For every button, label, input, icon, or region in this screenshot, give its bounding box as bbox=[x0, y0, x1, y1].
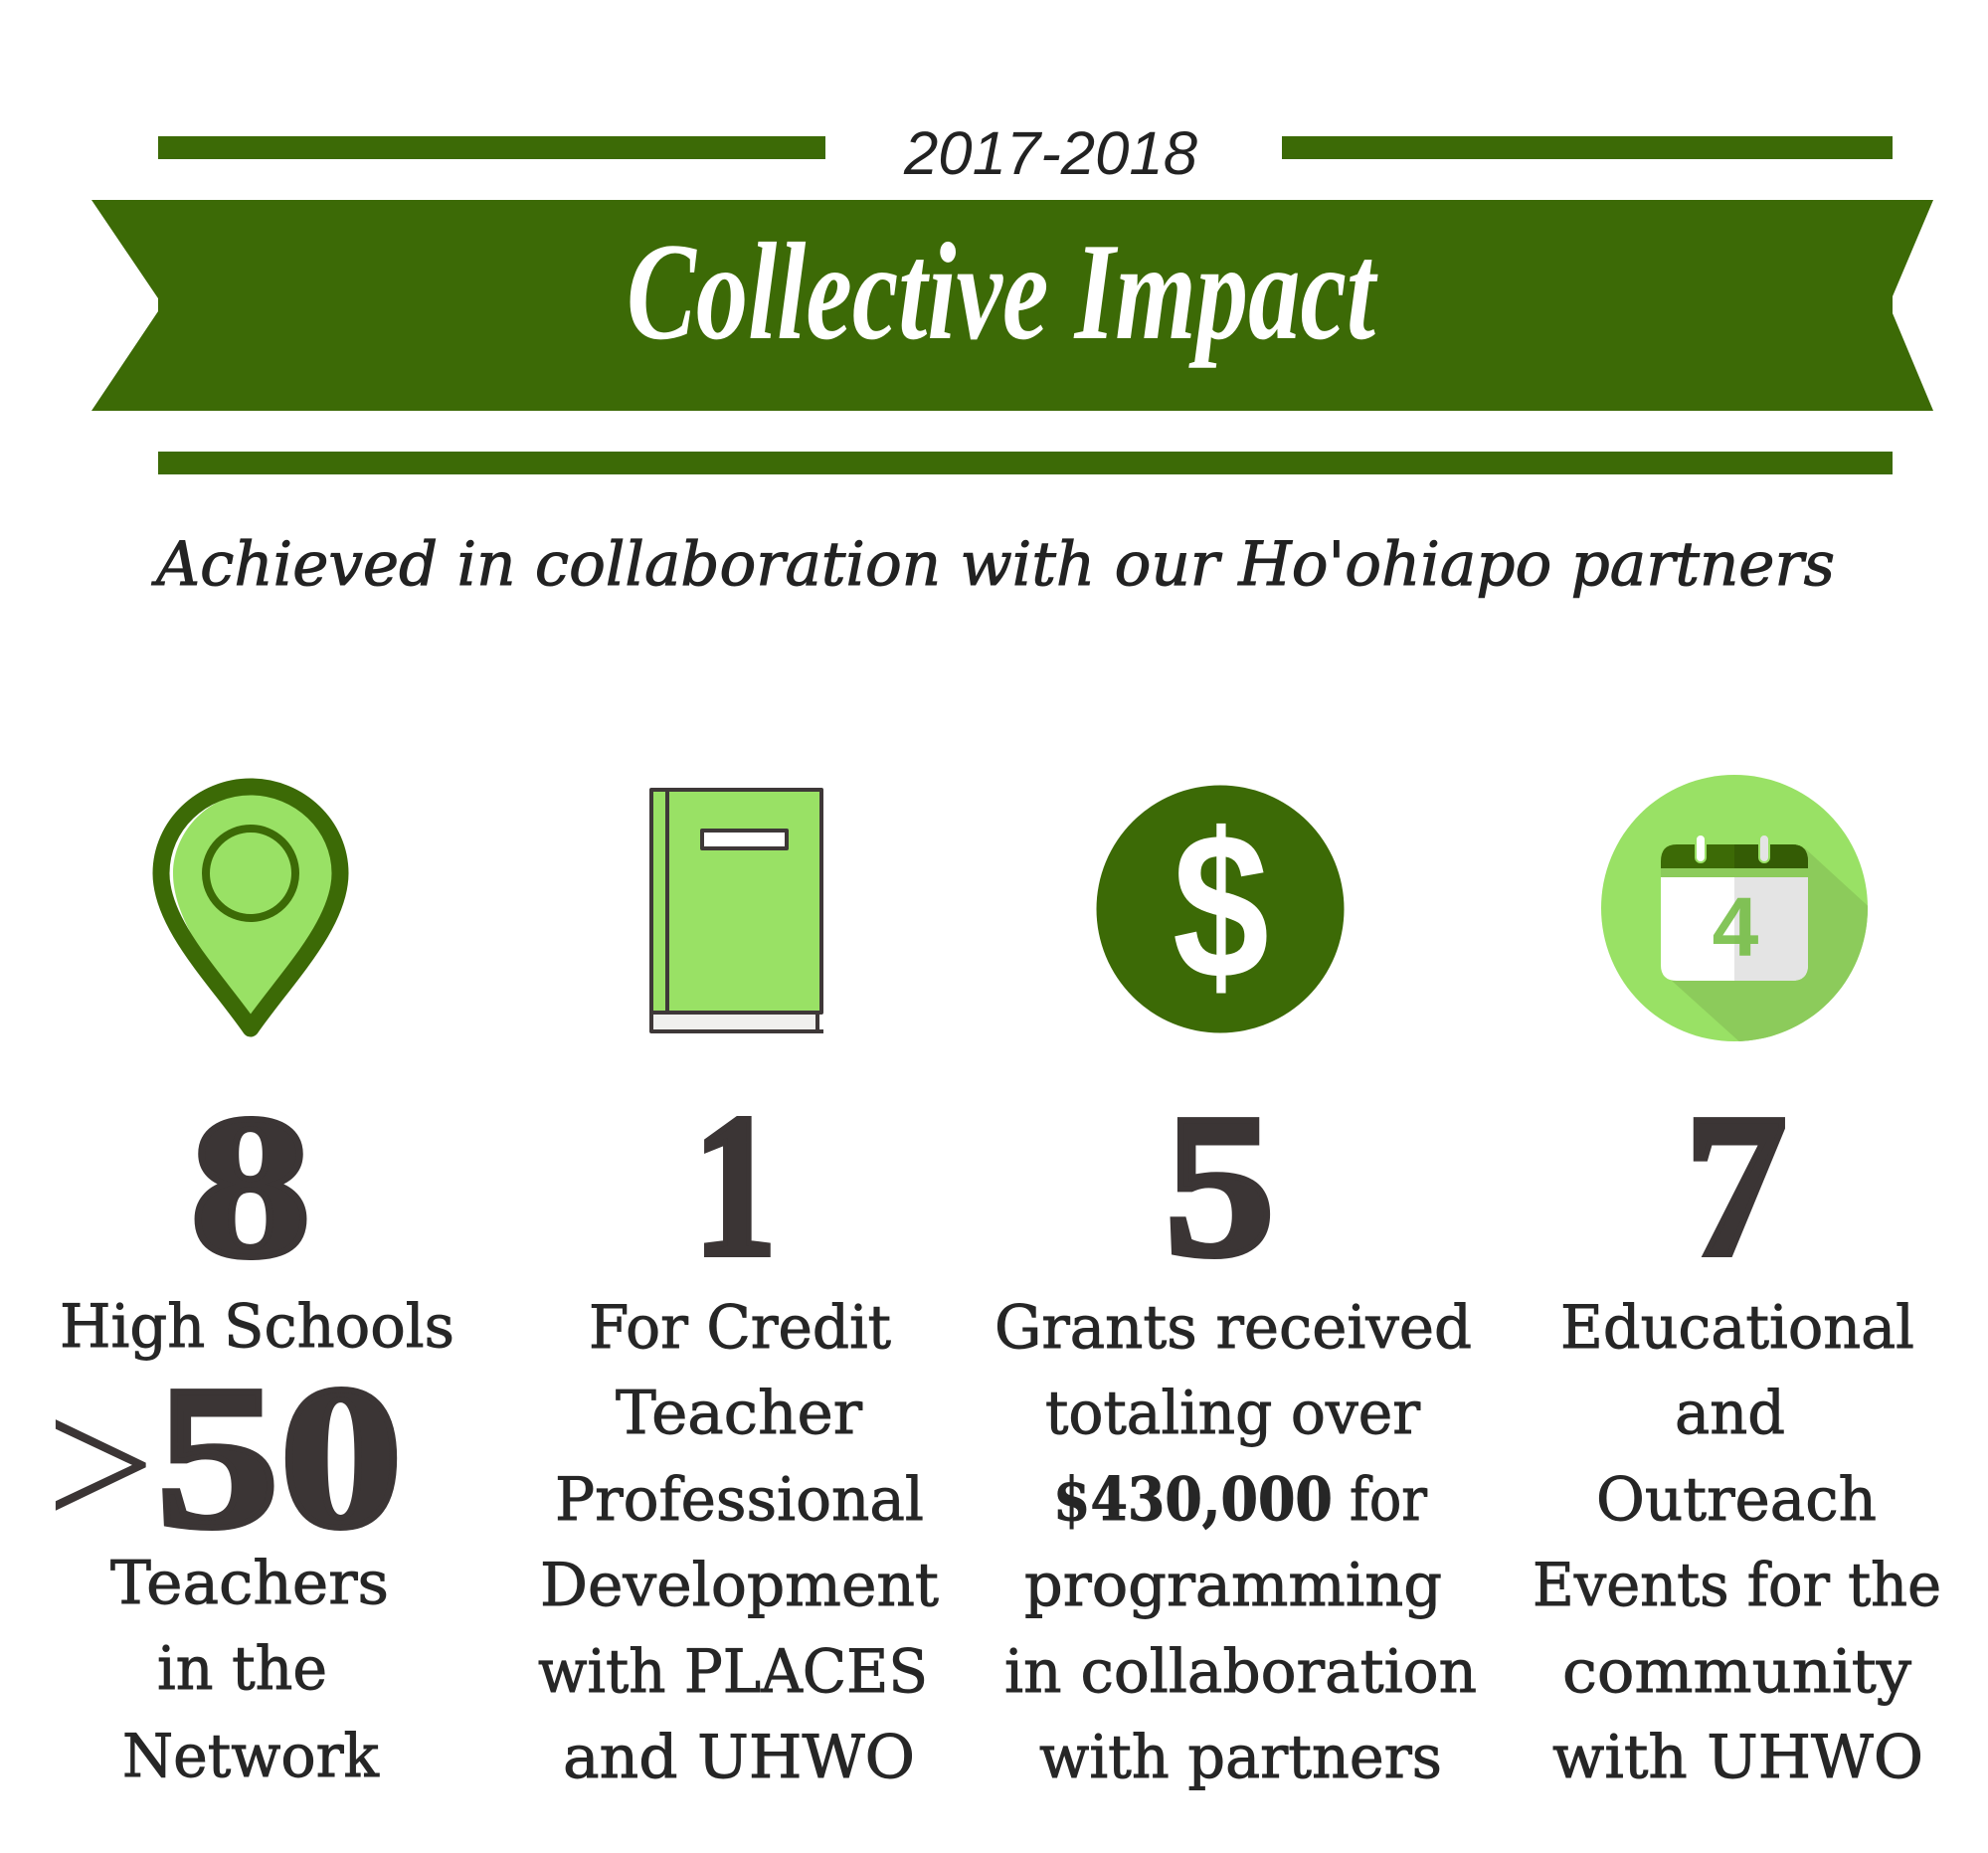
column 4 text: events: Events for the bbox=[1533, 1551, 1941, 1620]
column 3 text: grants: with partners bbox=[1039, 1723, 1442, 1792]
column 1 text: teachers in the network bbox=[110, 1549, 389, 1791]
column 1 text: high schools: High Schools bbox=[60, 1292, 454, 1362]
column 1 text: teachers in the network: Network bbox=[122, 1722, 380, 1791]
header rule left bbox=[158, 136, 825, 159]
icon: calendar: 4 bbox=[1713, 880, 1759, 974]
column 4 text: events: and bbox=[1675, 1379, 1785, 1448]
icon: book bbox=[651, 790, 823, 1031]
column 1 text: teachers in the network: Teachers bbox=[110, 1549, 389, 1618]
column 3 text: grants: programming bbox=[1024, 1551, 1442, 1620]
column 4 text: events: Outreach bbox=[1596, 1465, 1877, 1535]
big number: more than 50 bbox=[46, 1343, 403, 1571]
column 3 text: grants: totaling over bbox=[1045, 1379, 1420, 1448]
column 4 text: events: community bbox=[1562, 1637, 1911, 1707]
column 3 text: grants bbox=[994, 1293, 1477, 1792]
column 2 text: professional development: Professional bbox=[555, 1465, 924, 1535]
column 4 text: events: Educational bbox=[1560, 1293, 1914, 1363]
column 4 text: events bbox=[1533, 1293, 1941, 1792]
column 3 text: grants: Grants received bbox=[994, 1293, 1472, 1363]
big number 7: 7 bbox=[1685, 1071, 1787, 1299]
icon: dollar coin bbox=[1096, 786, 1345, 1032]
big number 5: 5 bbox=[1165, 1071, 1275, 1299]
title ribbon bbox=[91, 200, 1933, 411]
big number 1: 1 bbox=[693, 1071, 777, 1299]
header rule right bbox=[1282, 136, 1893, 159]
column 4 text: events: with UHWO bbox=[1552, 1723, 1923, 1792]
column 2 text: professional development: and UHWO bbox=[563, 1723, 915, 1792]
icon: calendar bbox=[1601, 775, 1876, 1044]
title: Collective Impact bbox=[627, 215, 1378, 369]
column 2 text: professional development: with PLACES bbox=[538, 1637, 928, 1707]
column 2 text: professional development: Teacher bbox=[616, 1379, 862, 1448]
big number: more than 50: > bbox=[46, 1361, 155, 1570]
big number 8: 8 bbox=[190, 1072, 311, 1300]
column 2 text: professional development bbox=[538, 1293, 939, 1792]
column 1 text: teachers in the network: in the bbox=[157, 1634, 327, 1704]
tagline: Achieved in collaboration with our Ho'ohiapo partners bbox=[151, 529, 1835, 600]
column 2 text: professional development: Development bbox=[540, 1551, 939, 1620]
big number: more than 50: 50 bbox=[156, 1343, 403, 1571]
icon: map pin bbox=[161, 787, 340, 1028]
year label: 2017-2018 bbox=[903, 119, 1197, 187]
column 3 text: grants: in collaboration bbox=[1004, 1637, 1477, 1707]
column 2 text: professional development: For Credit bbox=[589, 1293, 891, 1363]
icon: dollar coin: $ bbox=[1173, 791, 1269, 1022]
lower header rule bbox=[158, 452, 1893, 474]
column 3 text: grants: $430,000 for bbox=[1053, 1465, 1427, 1535]
